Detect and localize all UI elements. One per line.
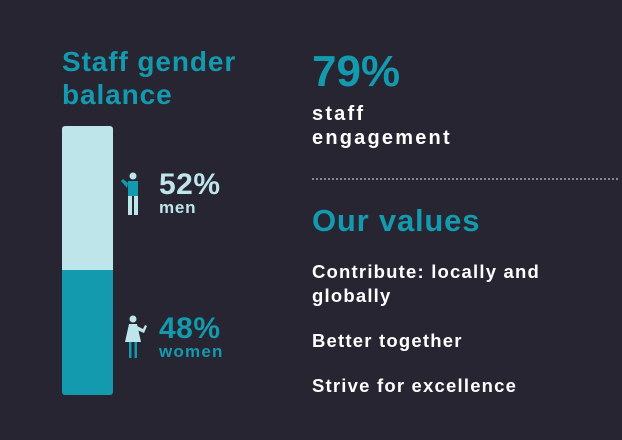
stat: 79% staff engagement: 79% bbox=[312, 47, 400, 96]
heading: our values: Our values bbox=[312, 203, 480, 238]
stat: 52% men: 52% bbox=[159, 168, 221, 201]
title: staff gender balance bbox=[62, 46, 236, 110]
stat: 48% women: women bbox=[159, 342, 224, 361]
stat: 52% men: men bbox=[159, 198, 196, 217]
bar segment: women bbox=[62, 270, 113, 395]
title: staff gender balance: balance bbox=[62, 79, 173, 110]
bar segment: men bbox=[62, 126, 113, 270]
title: staff gender balance: Staff gender bbox=[62, 46, 236, 77]
stat: 79% staff engagement: staff bbox=[312, 103, 365, 125]
stat: 48% women bbox=[159, 312, 224, 361]
value 3: Strive for excellence bbox=[312, 375, 517, 396]
bar chart: gender split bbox=[62, 126, 113, 395]
icon: woman bbox=[125, 316, 147, 358]
value 1: Contribute: locally and bbox=[312, 261, 540, 282]
icon: man bbox=[121, 172, 138, 215]
stat: 79% staff engagement: engagement bbox=[312, 127, 452, 149]
value 1 bbox=[312, 261, 540, 306]
stat: 48% women: 48% bbox=[159, 312, 221, 345]
stat: 79% staff engagement bbox=[312, 47, 452, 149]
value 2: Better together bbox=[312, 330, 463, 351]
value 1: globally bbox=[312, 285, 392, 306]
list: values bbox=[312, 261, 540, 396]
stat: 52% men bbox=[159, 168, 221, 217]
